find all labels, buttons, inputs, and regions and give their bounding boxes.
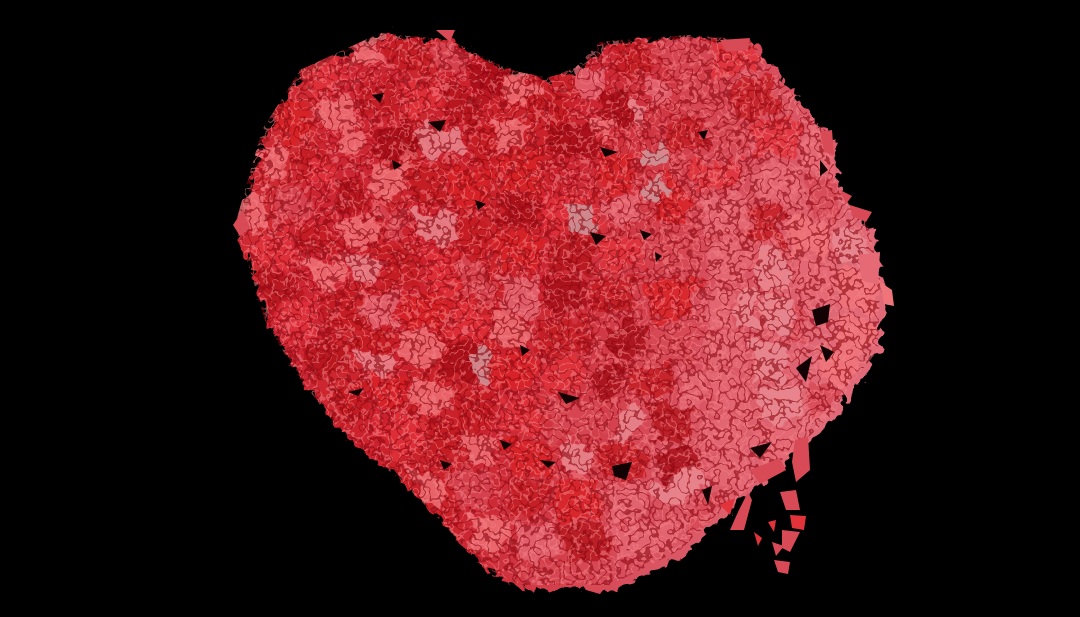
heart shards	[236, 33, 880, 585]
fine light fractures	[236, 33, 880, 585]
fine dark fractures	[236, 34, 880, 585]
heart silhouette	[235, 33, 880, 585]
flying debris	[233, 30, 894, 594]
dark gaps between shards	[348, 93, 834, 505]
background and shattered heart illustration	[233, 28, 894, 594]
